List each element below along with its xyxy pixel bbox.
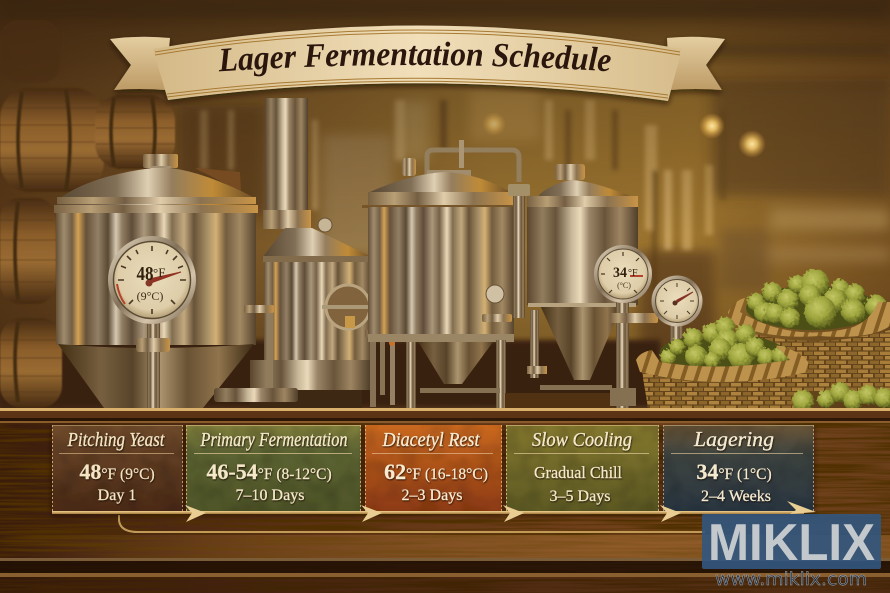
card: Diacetyl Rest: Diacetyl Rest <box>382 429 480 451</box>
tank: third fermenter <box>505 164 638 408</box>
pipework below tanks <box>214 244 428 408</box>
gauge reading <box>136 263 165 303</box>
arrow: step 3 to 4 <box>503 505 524 522</box>
card: Slow Cooling <box>506 425 659 512</box>
icon: 34°F temperature gauge <box>594 245 658 408</box>
card: Primary Fermentation: 7–10 Days <box>236 487 304 504</box>
card: Lagering <box>663 425 814 512</box>
title banner <box>110 26 726 107</box>
gauge reading: 34 <box>613 265 627 281</box>
card: Slow Cooling: 3–5 Days <box>550 488 610 505</box>
barrels at left <box>0 20 175 408</box>
banner main <box>153 26 682 101</box>
card: Lagering: 2–4 Weeks <box>701 488 771 505</box>
timeline arrow bar <box>52 501 816 522</box>
panel: wooden timeline board <box>0 408 890 593</box>
gauge reading: (°C) <box>617 281 631 290</box>
hop basket: back right <box>728 269 890 392</box>
icon: secondary gauge <box>652 276 702 348</box>
card: Lagering: 34°F (1°C) <box>696 459 772 484</box>
card: Primary Fermentation <box>186 425 361 512</box>
gauge reading: °F <box>153 265 165 280</box>
title: Lager Fermentation Schedule <box>218 42 611 76</box>
tank: second fermenter <box>362 140 530 408</box>
arrow: step 1 to 2 <box>185 505 206 522</box>
card: Slow Cooling: Gradual Chill <box>534 463 622 482</box>
card: Primary Fermentation: Primary Fermentation <box>200 429 348 451</box>
card: Primary Fermentation: 46-54°F (8-12°C) <box>206 459 332 484</box>
card: Pitching Yeast: Pitching Yeast <box>67 429 165 451</box>
card: Diacetyl Rest <box>365 425 502 512</box>
tank: first fermenter with gauge <box>54 154 258 408</box>
gauge reading <box>613 265 638 290</box>
hop basket: front left <box>636 317 808 408</box>
card: Pitching Yeast: Day 1 <box>98 487 136 504</box>
watermark logo: MIKLIX <box>708 514 875 572</box>
arrow: step 4 to 5 <box>660 505 681 522</box>
card: Diacetyl Rest: 62°F (16-18°C) <box>384 459 488 484</box>
icon: 48°F temperature gauge <box>108 236 196 324</box>
background: blurred brewery cellar <box>0 0 890 410</box>
return line under timeline <box>119 515 705 532</box>
gauge reading: (9°C) <box>137 289 163 303</box>
gauge reading: °F <box>628 268 638 279</box>
card: Lagering: Lagering <box>693 427 774 451</box>
card: Pitching Yeast: 48°F (9°C) <box>79 459 155 484</box>
arrow: step 2 to 3 <box>361 505 382 522</box>
watermark url: www.miklix.com <box>715 570 867 590</box>
icon: sight glass <box>322 285 375 329</box>
hops: foreground pile <box>792 382 890 412</box>
card: Diacetyl Rest: 2–3 Days <box>402 487 462 504</box>
banner tail right <box>667 37 725 90</box>
card: Slow Cooling: Slow Cooling <box>532 429 632 451</box>
tank: tall kettle with stack <box>250 98 375 408</box>
gauge reading: 48 <box>136 263 154 285</box>
card: Pitching Yeast <box>52 425 183 512</box>
arrow: final <box>787 501 816 514</box>
banner tail left <box>110 37 170 90</box>
